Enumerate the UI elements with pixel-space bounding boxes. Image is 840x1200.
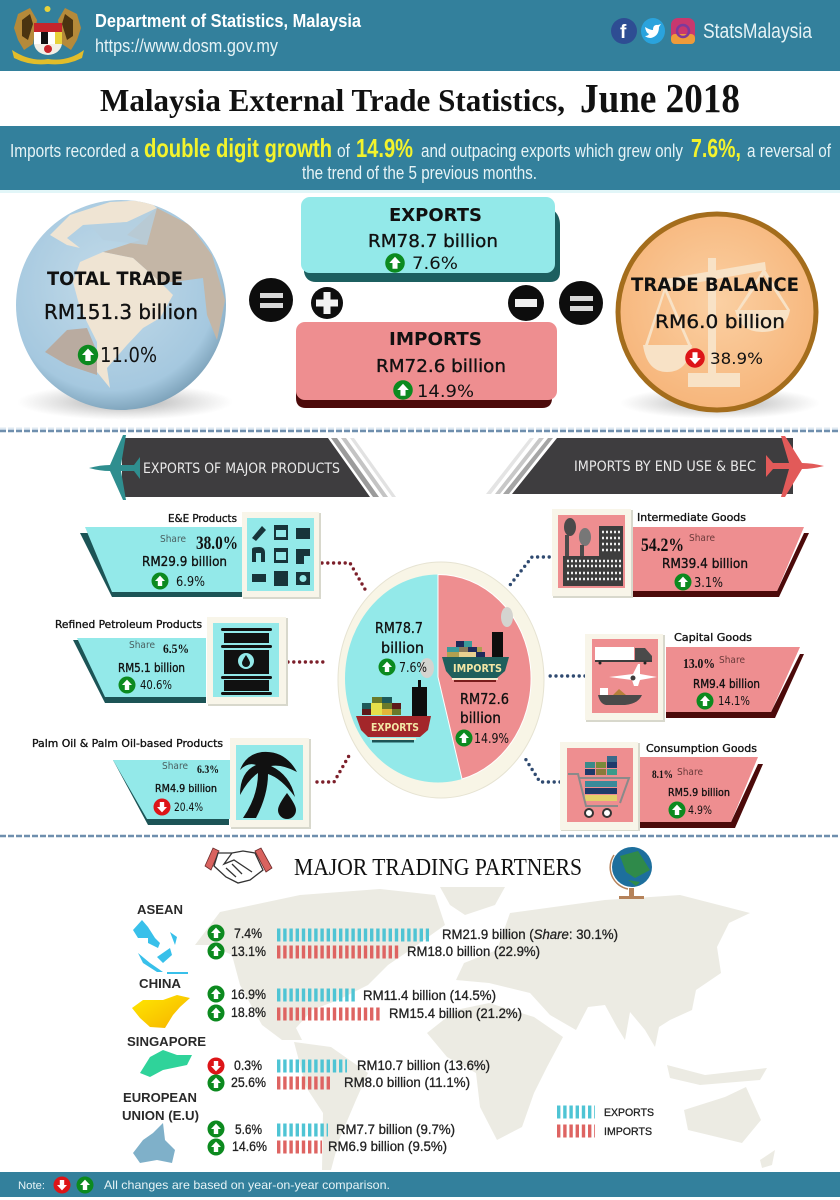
banner text: IMPORTS BY END USE & BEC bbox=[574, 459, 756, 475]
exports change bbox=[385, 253, 458, 274]
ASEAN import bar bbox=[208, 942, 540, 960]
panel: refined petroleum bbox=[55, 617, 288, 706]
panel: capital goods bbox=[585, 631, 804, 722]
icon: export ship: EXPORTS bbox=[371, 721, 419, 734]
Singapore label: SINGAPORE bbox=[127, 1034, 206, 1049]
icon: minus bbox=[508, 285, 544, 321]
header bar bbox=[0, 0, 840, 71]
major trading partners heading bbox=[205, 847, 652, 899]
capital label: Capital Goods bbox=[674, 631, 752, 644]
panel: consumption goods bbox=[560, 742, 763, 831]
import pie change: 14.9% bbox=[474, 732, 509, 747]
intermediate change bbox=[674, 574, 723, 591]
import pie unit: billion bbox=[460, 709, 501, 727]
icon: instagram bbox=[671, 18, 695, 44]
palm oil label: Palm Oil & Palm Oil-based Products bbox=[32, 737, 223, 750]
imports change: 14.9% bbox=[417, 382, 474, 402]
China export bar bbox=[208, 986, 496, 1003]
export pie change bbox=[378, 658, 427, 676]
icon: equals right bbox=[559, 281, 603, 325]
E&E change bbox=[152, 572, 205, 590]
capital icon frame bbox=[585, 634, 665, 722]
capital share: Share bbox=[719, 655, 745, 666]
title: Malaysia External Trade Statistics, bbox=[100, 82, 565, 118]
E&E share: Share bbox=[160, 534, 186, 545]
header social handle: StatsMalaysia bbox=[703, 20, 812, 43]
partner: ASEAN bbox=[133, 902, 618, 974]
icon: red plane bbox=[766, 436, 824, 497]
EU import bar: 14.6% bbox=[232, 1139, 267, 1154]
import pie change bbox=[456, 730, 509, 747]
petroleum change: 40.6% bbox=[140, 678, 172, 692]
trade balance value: RM6.0 billion bbox=[655, 311, 785, 333]
capital change bbox=[696, 692, 750, 710]
panel: palm oil bbox=[32, 737, 311, 829]
total trade change: 11.0% bbox=[100, 343, 157, 367]
ASEAN export bar: 7.4% bbox=[234, 926, 262, 941]
intermediate icon frame bbox=[552, 509, 633, 598]
icon: twitter bbox=[641, 18, 665, 44]
connector dots: capital bbox=[545, 674, 585, 678]
petroleum icon frame bbox=[207, 617, 288, 706]
Singapore export bar: 0.3% bbox=[234, 1058, 262, 1073]
ASEAN import bar: 13.1% bbox=[231, 944, 266, 959]
header department name: Department of Statistics, Malaysia bbox=[95, 11, 362, 31]
imports change bbox=[393, 380, 474, 402]
China import bar: RM15.4 billion (21.2%) bbox=[389, 1005, 522, 1021]
imports label: IMPORTS bbox=[389, 329, 482, 350]
icon: equals left bbox=[249, 278, 293, 322]
intermediate label: Intermediate Goods bbox=[637, 511, 746, 524]
capital value: RM9.4 billion bbox=[693, 677, 760, 691]
icon: import ship: IMPORTS bbox=[453, 662, 502, 675]
summary banner bbox=[0, 126, 840, 193]
China import bar bbox=[208, 1004, 522, 1022]
consumption change bbox=[668, 802, 712, 818]
icon: handshake bbox=[205, 848, 272, 883]
exports change: 7.6% bbox=[412, 254, 458, 274]
footer note: Note: bbox=[18, 1180, 45, 1192]
export pie change: 7.6% bbox=[399, 661, 427, 676]
partner: Singapore bbox=[127, 1034, 490, 1092]
Singapore export bar: RM10.7 billion (13.6%) bbox=[357, 1057, 490, 1073]
title: June 2018 bbox=[580, 75, 740, 121]
Singapore export bar bbox=[208, 1057, 490, 1074]
summary banner: double digit growth bbox=[144, 133, 332, 163]
connector dots: E&E bbox=[322, 563, 366, 591]
Singapore import bar bbox=[208, 1074, 470, 1092]
imports value: RM72.6 billion bbox=[376, 356, 506, 377]
banner: imports by end use bbox=[486, 436, 824, 497]
summary banner: and outpacing exports which grew only bbox=[421, 141, 683, 161]
import pie value: RM72.6 bbox=[460, 690, 509, 708]
total trade label: TOTAL TRADE bbox=[47, 268, 183, 290]
EU import bar: RM6.9 billion (9.5%) bbox=[328, 1138, 447, 1154]
EU export bar: RM7.7 billion (9.7%) bbox=[336, 1121, 455, 1137]
EU label: EUROPEAN bbox=[123, 1090, 197, 1105]
petroleum label: Refined Petroleum Products bbox=[55, 618, 202, 631]
icon: import ship bbox=[442, 607, 513, 682]
palm share value: 6.3% bbox=[197, 762, 219, 776]
icon: teal plane bbox=[89, 435, 140, 500]
petroleum share value: 6.5% bbox=[163, 641, 189, 656]
icon: EU map bbox=[133, 1123, 175, 1163]
panel: imports bbox=[296, 322, 557, 408]
icon: balance scale bbox=[643, 258, 790, 387]
banner text: EXPORTS OF MAJOR PRODUCTS bbox=[143, 461, 340, 477]
legend: IMPORTS bbox=[604, 1126, 652, 1138]
E&E label: E&E Products bbox=[168, 512, 237, 525]
palm share: Share bbox=[162, 761, 188, 772]
pie chart: exports vs imports bbox=[338, 562, 544, 798]
panel: exports bbox=[301, 197, 560, 282]
EU export bar: 5.6% bbox=[235, 1122, 262, 1137]
E&E icon frame bbox=[242, 512, 321, 599]
icon: desk globe bbox=[610, 847, 652, 899]
heading text: MAJOR TRADING PARTNERS bbox=[294, 855, 582, 881]
legend bbox=[557, 1107, 654, 1138]
connector dots: consumption bbox=[523, 755, 560, 782]
petroleum change bbox=[118, 676, 172, 694]
partner: European Union bbox=[122, 1090, 455, 1163]
consumption change: 4.9% bbox=[688, 803, 712, 817]
China export bar: RM11.4 billion (14.5%) bbox=[363, 987, 496, 1003]
ASEAN label: ASEAN bbox=[137, 902, 183, 917]
EU label second line: UNION (E.U) bbox=[122, 1108, 199, 1123]
panel: intermediate goods bbox=[552, 509, 809, 598]
connector dots: intermediate bbox=[510, 557, 555, 585]
capital share value: 13.0% bbox=[683, 657, 715, 672]
intermediate share: Share bbox=[689, 533, 715, 544]
intermediate share value: 54.2% bbox=[641, 535, 684, 556]
consumption share value: 8.1% bbox=[652, 767, 673, 781]
summary banner: the trend of the 5 previous months. bbox=[302, 163, 537, 183]
legend: EXPORTS bbox=[604, 1107, 654, 1119]
China export bar: 16.9% bbox=[231, 987, 266, 1002]
icon: facebook: f bbox=[620, 22, 627, 43]
palm icon frame bbox=[230, 738, 311, 829]
panel: trade balance bbox=[618, 214, 820, 419]
icon: export ship bbox=[356, 658, 434, 742]
export pie value: RM78.7 bbox=[375, 619, 423, 637]
header website: https://www.dosm.gov.my bbox=[95, 36, 278, 56]
EU export bar bbox=[208, 1120, 455, 1138]
ASEAN import bar: RM18.0 billion (22.9%) bbox=[407, 943, 540, 959]
total trade value: RM151.3 billion bbox=[44, 300, 198, 324]
consumption icon frame bbox=[560, 742, 640, 831]
ASEAN export bar: RM21.9 billion (Share: 30.1%) bbox=[442, 926, 618, 942]
icon: facebook bbox=[611, 18, 637, 44]
E&E share value: 38.0% bbox=[196, 533, 238, 554]
icon: Singapore map bbox=[140, 1050, 192, 1077]
consumption share: Share bbox=[677, 767, 703, 778]
Singapore import bar: RM8.0 billion (11.1%) bbox=[344, 1074, 470, 1090]
connector dots: petroleum bbox=[288, 660, 326, 664]
petroleum share: Share bbox=[129, 640, 155, 651]
footer note bbox=[0, 1172, 840, 1197]
icon: coat of arms bbox=[12, 6, 84, 64]
exports value: RM78.7 billion bbox=[368, 231, 498, 252]
summary banner: Imports recorded a bbox=[10, 141, 140, 161]
petroleum value: RM5.1 billion bbox=[118, 661, 185, 675]
panel: total trade globe bbox=[16, 200, 233, 420]
palm change bbox=[154, 798, 203, 816]
Singapore import bar: 25.6% bbox=[231, 1075, 266, 1090]
consumption value: RM5.9 billion bbox=[668, 786, 730, 799]
intermediate value: RM39.4 billion bbox=[662, 557, 748, 572]
summary banner: of bbox=[337, 141, 351, 161]
world map background bbox=[195, 887, 775, 1170]
total trade change bbox=[78, 343, 157, 367]
export pie unit: billion bbox=[381, 639, 424, 657]
trade balance change: 38.9% bbox=[710, 349, 763, 368]
ASEAN export bar bbox=[208, 924, 618, 942]
icon: China map bbox=[132, 995, 190, 1028]
consumption label: Consumption Goods bbox=[646, 742, 757, 755]
summary banner: 14.9% bbox=[356, 133, 413, 163]
intermediate change: 3.1% bbox=[694, 576, 723, 591]
palm change: 20.4% bbox=[174, 800, 203, 814]
China import bar: 18.8% bbox=[231, 1005, 266, 1020]
banner: exports of major products bbox=[89, 435, 396, 500]
partner: China bbox=[132, 976, 522, 1028]
footer note: All changes are based on year-on-year comparison. bbox=[104, 1178, 390, 1192]
capital change: 14.1% bbox=[718, 694, 750, 708]
trade balance label: TRADE BALANCE bbox=[631, 274, 799, 296]
icon: plus bbox=[311, 287, 343, 319]
E&E value: RM29.9 billion bbox=[142, 555, 227, 570]
panel: E&E products bbox=[80, 512, 321, 599]
palm value: RM4.9 billion bbox=[155, 782, 217, 795]
icon: ASEAN map bbox=[133, 920, 188, 974]
title bbox=[100, 75, 740, 121]
exports label: EXPORTS bbox=[389, 205, 482, 226]
China label: CHINA bbox=[139, 976, 182, 991]
connector dots: palm oil bbox=[317, 754, 350, 782]
summary banner: 7.6%, bbox=[691, 133, 741, 163]
trade balance change bbox=[685, 348, 763, 368]
EU import bar bbox=[208, 1138, 447, 1156]
E&E change: 6.9% bbox=[176, 575, 205, 590]
